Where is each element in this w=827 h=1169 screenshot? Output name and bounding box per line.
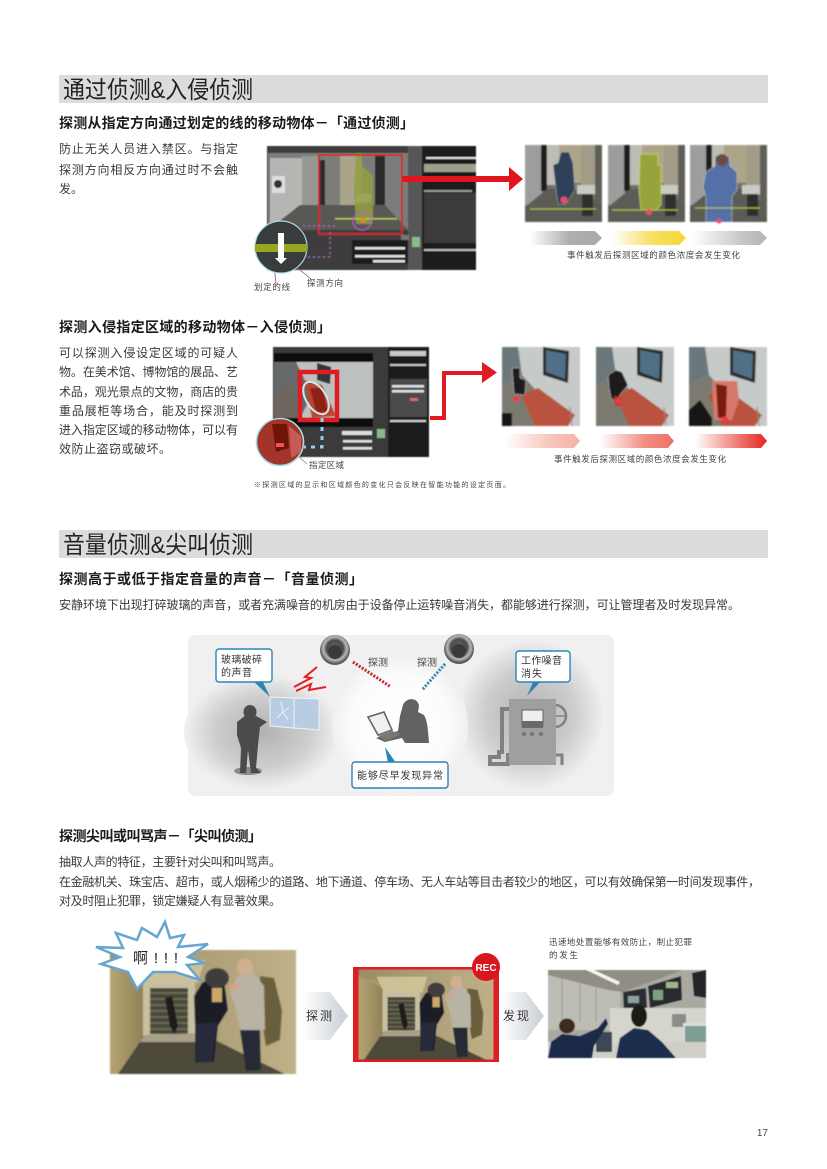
- arrow: 探测 chevron: 探测: [306, 1009, 332, 1023]
- text block: 入侵侦测 description: 效防止盗窃或破坏。: [59, 441, 171, 456]
- callout: 玻璃破碎的声音: 玻璃破碎: [221, 653, 262, 666]
- icon: dome camera right: [444, 634, 474, 664]
- icon: magnified designated area: [256, 418, 307, 466]
- callout: 能够尽早发现异常: [352, 747, 448, 788]
- callout: scream burst: 啊!!!: [133, 950, 178, 967]
- arrow: red arrow to sample frames: [402, 167, 523, 191]
- screenshot: intrusion setup UI: [273, 347, 429, 457]
- callout: 工作噪音消失: [516, 651, 570, 696]
- icon: dome camera left: [320, 635, 350, 665]
- caption: 入侵侦测 density change: 事件触发后探测区域的颜色浓度会发生变化: [554, 454, 726, 464]
- arrow: red detection dotted line: [353, 662, 391, 687]
- text block: 尖叫侦测 description: 对及时阻止犯罪，锁定嫌疑人有显著效果。: [59, 893, 281, 908]
- heading: 尖叫侦测: 探测尖叫或叫骂声－「尖叫侦测」: [59, 828, 262, 844]
- text block: 入侵侦测 description: 物。在美术馆、博物馆的展品、艺: [59, 364, 238, 379]
- callout: 玻璃破碎的声音: [216, 649, 272, 697]
- icon: red spark: [294, 667, 326, 691]
- text block: 入侵侦测 description: [59, 345, 238, 456]
- text block: 通过侦测 description: [59, 141, 238, 196]
- callout: 工作噪音消失: 消失: [521, 667, 542, 680]
- section header: 音量侦测&尖叫侦测: 音量侦测&尖叫侦测: [63, 532, 253, 559]
- arrow: red elbow arrow to intrusion frames: [430, 362, 497, 420]
- frame 1: grey silhouette: [525, 145, 602, 222]
- callout: 能够尽早发现异常: 能够尽早发现异常: [357, 769, 443, 782]
- text block: response note: [549, 937, 692, 960]
- text block: response note: 迅速地处置能够有效防止，制止犯罪: [549, 937, 692, 947]
- icon: intruder breaking window: [234, 697, 319, 775]
- frame 3: intruder inside zone: [689, 347, 767, 426]
- label: 探测方向: 探测方向: [307, 278, 343, 288]
- frame 1: intruder at distance: [502, 347, 580, 426]
- text block: 入侵侦测 description: 可以探测入侵设定区域的可疑人: [59, 345, 238, 360]
- callout: scream burst: [96, 922, 208, 989]
- frame 2: yellow highlight: [608, 145, 685, 222]
- screenshot: line crossing setup UI: [267, 146, 476, 270]
- label: 指定区域: 指定区域: [309, 460, 344, 470]
- icon: magnified detection line and direction: [255, 221, 311, 284]
- text block: 入侵侦测 description: 进入指定区域的移动物体，可以有: [59, 422, 238, 437]
- caption: 通过侦测 density change: 事件触发后探测区域的颜色浓度会发生变化: [567, 250, 740, 260]
- arrow: 发现 chevron: 发现: [503, 1008, 529, 1023]
- icon: machine with gauge: [490, 699, 566, 765]
- text block: 通过侦测 description: 探测方向相反方向通过时不会触: [59, 162, 238, 177]
- heading: 通过侦测: 探测从指定方向通过划定的线的移动物体－「通过侦测」: [59, 115, 414, 131]
- footnote: ※探测区域的显示和区域颜色的变化只会反映在智能功能的设定页面。: [254, 480, 510, 489]
- label: 探测 right: 探测: [417, 656, 437, 669]
- arrow: blue detection dotted line: [422, 664, 445, 690]
- photo: recorded scene with red frame: [353, 953, 500, 1062]
- text block: 音量侦测 description: 安静环境下出现打碎玻璃的声音，或者充满噪音的机房由于设备停止运转噪音消失，都能够进行探测，可让管理者及时发现异常。: [59, 597, 740, 612]
- label: 划定的线: 划定的线: [254, 282, 290, 292]
- photo sequence: 通过侦测 frames: [525, 145, 767, 224]
- gradient arrows: 通过侦测 colour density: [530, 231, 767, 245]
- panel: sound detection illustration: [184, 634, 614, 796]
- icon: operator with laptop: [368, 699, 429, 743]
- arrow: 发现 chevron: [500, 992, 544, 1040]
- page number: 17: [757, 1128, 768, 1139]
- label: 探测 left: 探测: [368, 656, 388, 669]
- text block: 入侵侦测 description: 术品，观光景点的文物，商店的贵: [59, 384, 238, 399]
- marker: red zone and ellipse in screenshot: [298, 372, 337, 447]
- heading: 音量侦测: 探测高于或低于指定音量的声音－「音量侦测」: [59, 571, 363, 587]
- photo sequence: 入侵侦测 frames: [502, 347, 767, 426]
- badge: REC: REC: [475, 963, 497, 974]
- photo: control room: [548, 970, 706, 1058]
- callout: 玻璃破碎的声音: 的声音: [221, 666, 252, 679]
- gradient arrows: 入侵侦测 colour density: [505, 434, 767, 448]
- text block: 尖叫侦测 description: 抽取人声的特征，主要针对尖叫和叫骂声。: [59, 854, 281, 869]
- frame 2: intruder approaching: [596, 347, 674, 426]
- text block: 通过侦测 description: 发。: [59, 181, 83, 196]
- section header: 通过侦测&入侵侦测: 通过侦测&入侵侦测: [63, 77, 253, 104]
- text block: 通过侦测 description: 防止无关人员进入禁区。与指定: [59, 141, 238, 156]
- text block: 尖叫侦测 description: 在金融机关、珠宝店、超市，或人烟稀少的道路、地下通道、停车场、无人车站等目击者较少的地区，可以有效确保第一时间发现事件，: [59, 874, 760, 889]
- photo: scream scene in underpass: [110, 950, 296, 1074]
- section header: 音量侦测&尖叫侦测: [59, 530, 768, 559]
- badge: REC: [472, 953, 500, 981]
- heading: 入侵侦测: 探测入侵指定区域的移动物体－入侵侦测」: [59, 319, 331, 335]
- arrow: 探测 chevron: [303, 992, 348, 1040]
- frame 3: blue close person: [690, 145, 767, 224]
- text block: response note: 的发生: [549, 950, 578, 960]
- callout: 工作噪音消失: 工作噪音: [521, 654, 562, 667]
- text block: 入侵侦测 description: 重品展柜等场合，能及时探测到: [59, 403, 238, 418]
- section header: 通过侦测&入侵侦测: [59, 75, 768, 104]
- text block: 尖叫侦测 description: [59, 854, 760, 908]
